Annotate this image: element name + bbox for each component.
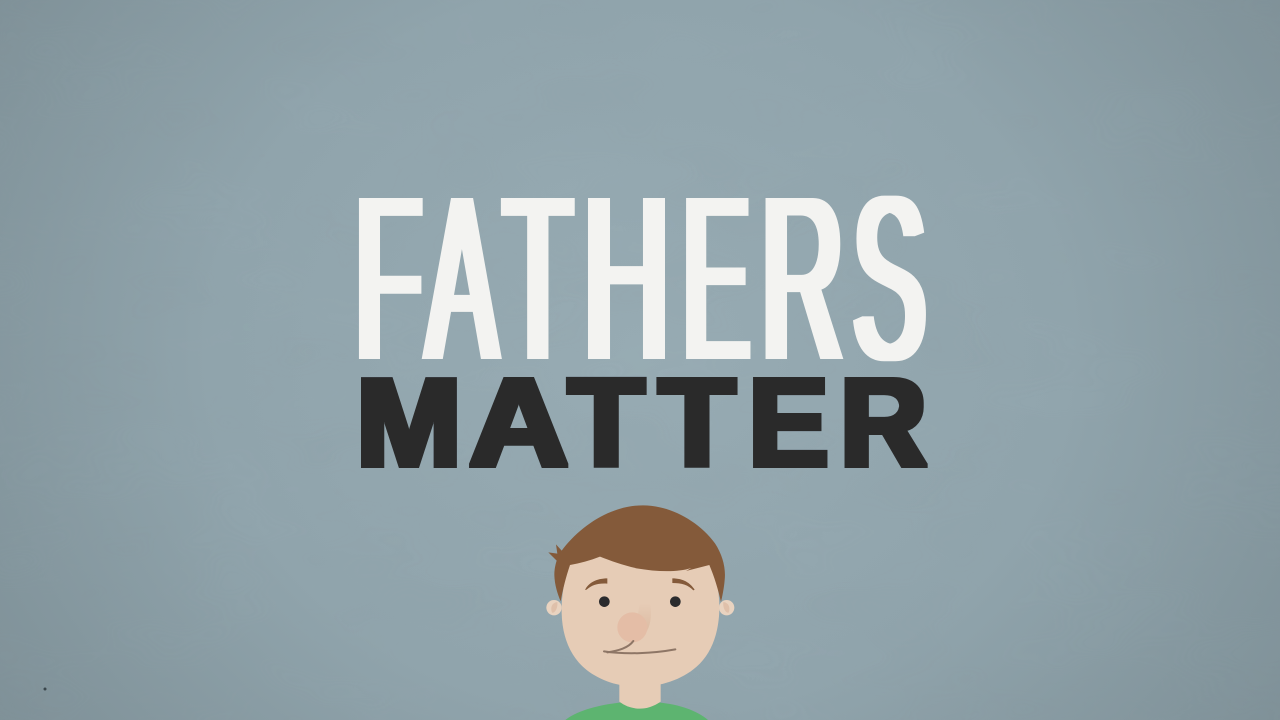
neck: [619, 677, 661, 709]
right ear: [719, 600, 734, 615]
title: FATHERS: H: [584, 148, 669, 409]
head: [562, 540, 719, 687]
title: FATHERS: A: [427, 148, 497, 409]
character: boy portrait: [546, 505, 734, 720]
shirt: [563, 703, 710, 720]
left ear: [546, 600, 562, 615]
right eyebrow: [672, 578, 695, 590]
nose bridge: [637, 603, 651, 634]
title: MATTER: A: [469, 352, 569, 494]
title: FATHERS: R: [762, 147, 843, 409]
title: FATHERS: T: [504, 147, 572, 409]
title: MATTER: R: [840, 352, 927, 494]
title: MATTER: E: [748, 352, 829, 494]
title: FATHERS: F: [356, 147, 421, 409]
left eyebrow: [585, 578, 607, 590]
right eye: [670, 596, 681, 607]
title: MATTER: T: [568, 351, 645, 493]
title: MATTER: M: [356, 351, 462, 493]
title: FATHERS: [356, 147, 925, 410]
mouth: [604, 641, 675, 653]
left eye: [599, 596, 610, 607]
title: MATTER: [356, 351, 927, 494]
nose tip: [617, 612, 647, 642]
title: FATHERS: E: [684, 148, 749, 410]
title: MATTER: T: [658, 352, 735, 493]
hair: [548, 505, 725, 602]
title: FATHERS: S: [854, 147, 925, 409]
